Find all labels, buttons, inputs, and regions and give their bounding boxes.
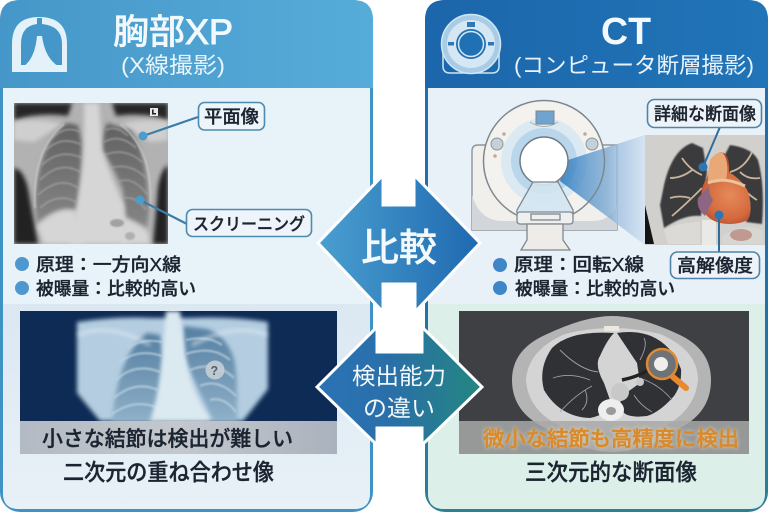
navy x-ray image	[20, 311, 337, 421]
caption: 2D image: 二次元の重ね合わせ像	[63, 459, 274, 485]
callout: detailed section	[648, 100, 762, 172]
bullet: dose CT: 被曝量：比較的高い	[515, 279, 675, 299]
header band: CT	[425, 0, 768, 88]
lower section background: chest XP	[3, 304, 370, 509]
illustration: CT scanner	[472, 100, 645, 250]
caption bar: CT	[459, 421, 749, 454]
panel: CT	[425, 0, 768, 512]
callout: flat image: 平面像	[204, 107, 259, 127]
heart and lung CT image	[645, 135, 765, 245]
caption bar: CT: 微小な結節も高精度に検出	[483, 428, 739, 451]
x-ray beam	[560, 135, 645, 245]
caption bar: CT: 微小な結節も高精度に検出	[483, 428, 739, 451]
arrow: detection ability: の違い	[363, 395, 435, 421]
arrow: compare	[318, 170, 480, 319]
arrow: compare: 比較	[361, 228, 437, 270]
callout: high resolution: 高解像度	[677, 256, 753, 276]
arrow: detection ability: 検出能力	[352, 363, 446, 389]
magnifier	[647, 349, 686, 388]
caption bar: XP: 小さな結節は検出が難しい	[42, 428, 293, 451]
panel body: CT	[428, 88, 765, 509]
bullet: principle CT: 原理：回転X線	[514, 255, 644, 275]
icon: CT scanner	[442, 14, 500, 74]
icon: lungs	[12, 17, 67, 72]
subtitle: X-ray: (X線撮影)	[121, 53, 225, 78]
subtitle: computed tomography: (コンピュータ断層撮影)	[514, 53, 754, 78]
navy x-ray image: ?	[210, 364, 218, 378]
caption bar: XP	[20, 421, 337, 454]
callout: detailed section: 詳細な断面像	[654, 104, 756, 124]
title: CT: CT	[601, 11, 651, 53]
bullet: dose XP: 被曝量：比較的高い	[36, 279, 196, 299]
caption: 3D image: 三次元的な断面像	[525, 459, 697, 485]
arrow: detection ability	[317, 322, 482, 445]
callout: screening: スクリーニング	[193, 215, 305, 234]
callout: high resolution	[670, 210, 760, 278]
header band: chest XP	[0, 0, 373, 88]
axial CT image	[459, 311, 749, 454]
bullet: principle XP: 原理：一方向X線	[36, 255, 181, 275]
callout: screening	[136, 196, 312, 236]
patient table	[517, 182, 573, 250]
panel: chest XP	[0, 0, 373, 512]
panel body: chest XP	[3, 88, 370, 509]
lower section background: CT	[428, 304, 765, 509]
chest x-ray image	[14, 103, 168, 244]
title: chest XP: 胸部XP	[113, 13, 233, 52]
callout: flat image	[138, 102, 264, 140]
